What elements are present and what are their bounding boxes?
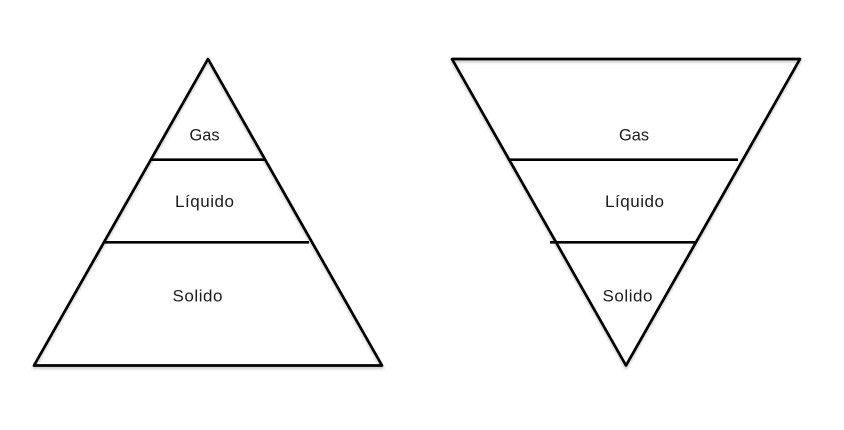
label: gas: Gas <box>619 126 649 144</box>
divider: gas and liquid <box>150 158 266 161</box>
triangle outline: upright <box>34 59 382 366</box>
label: gas: Gas <box>190 126 220 144</box>
shadow: upright triangle <box>34 61 382 368</box>
triangle outline: inverted <box>452 59 800 366</box>
divider: gas and liquid <box>508 158 738 161</box>
label: liquid: Líquido <box>175 192 234 211</box>
label: liquid: Líquido <box>605 192 664 211</box>
label: solid: Solido <box>602 287 652 306</box>
panel: inverted pyramid <box>452 59 800 368</box>
divider: liquid and solid <box>104 241 309 244</box>
divider: liquid and solid <box>550 241 696 244</box>
panel: upright pyramid <box>34 59 382 368</box>
shadow: inverted triangle <box>452 61 800 368</box>
label: solid: Solido <box>172 287 222 306</box>
